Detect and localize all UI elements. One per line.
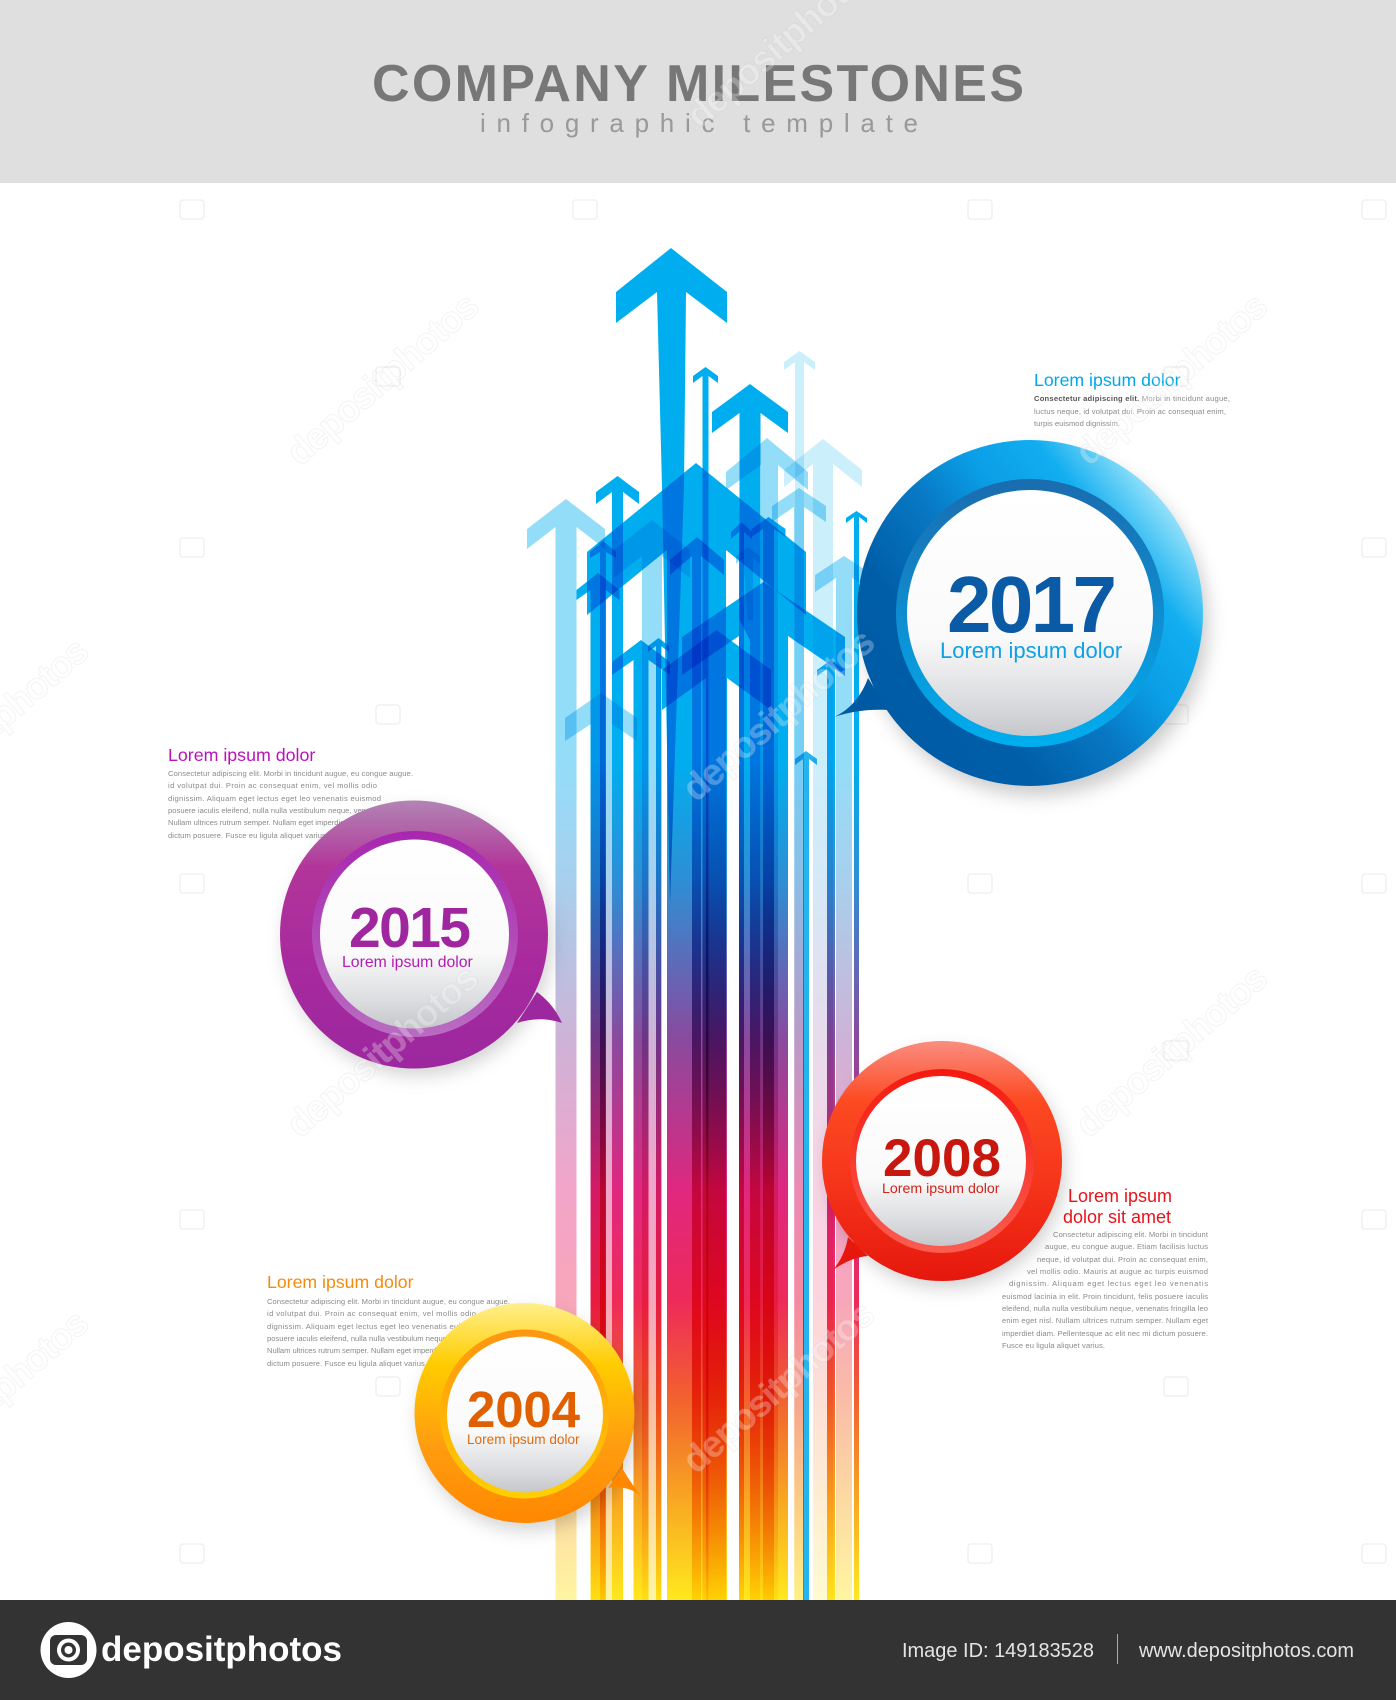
body: 2004 (267, 1297, 511, 1368)
body: 2015: Nullam ultrices rutrum semper. Nullam eget imperdiet diam. Pellentesque (168, 818, 413, 827)
heading: 2008 (1063, 1186, 1172, 1227)
header band (0, 0, 1396, 183)
year: 2008: 2008 (883, 1129, 1001, 1188)
body: 2017: Consectetur adipiscing elit. Morbi in tincidunt augue, (1034, 394, 1230, 403)
year: 2015: 2015 (349, 896, 471, 960)
heading: 2008: dolor sit amet (1063, 1207, 1171, 1227)
body: 2017: luctus neque, id volutpat dui. Proin ac consequat enim, (1034, 407, 1226, 416)
body: 2008 (1002, 1230, 1209, 1350)
text block: 2017 (1034, 370, 1230, 428)
body: 2017 (1034, 394, 1230, 428)
body: 2008: neque, id volutpat dui. Proin ac consequat enim, (1037, 1255, 1208, 1264)
body: 2015: posuere iaculis eleifend, nulla nulla vestibulum neque, venenatis fringilla (168, 806, 414, 815)
watermark camera icons (180, 200, 1386, 1563)
body: 2008: imperdiet diam. Pellentesque ac elit nec mi dictum posuere. (1002, 1329, 1208, 1338)
watermarks: depositphotos (1067, 285, 1275, 473)
title: COMPANY MILESTONES (372, 55, 1024, 113)
body: 2008: vel mollis odio. Mauris at augue ac turpis euismod (1027, 1267, 1208, 1276)
body: 2015: dignissim. Aliquam eget lectus eget leo venenatis euismod (168, 794, 381, 803)
body: 2004: dictum posuere. Fusce eu ligula aliquet varius. (267, 1359, 427, 1368)
year: 2004: 2004 (467, 1381, 581, 1438)
body: 2015 (168, 769, 414, 840)
text block: 2015 (168, 745, 414, 840)
footer logo icon (40, 1622, 96, 1678)
body: 2015: dictum posuere. Fusce eu ligula aliquet varius. (168, 831, 328, 840)
image id: Image ID: 149183528 (902, 1640, 1094, 1662)
label: 2008: Lorem ipsum dolor (882, 1181, 1000, 1197)
body: 2008: Fusce eu ligula aliquet varius. (1002, 1341, 1105, 1350)
watermarks: depositphotos (674, 1293, 882, 1481)
label: 2015: Lorem ipsum dolor (342, 954, 473, 971)
text block: 2008 (1002, 1186, 1209, 1350)
body: 2015: Consectetur adipiscing elit. Morbi in tincidunt augue, eu congue augue. (168, 769, 413, 778)
website: www.depositphotos.com (1138, 1640, 1354, 1662)
milestone bubble: 2004 (414, 1303, 640, 1530)
watermarks: depositphotos (278, 957, 486, 1145)
milestone bubble: 2015 (280, 800, 562, 1075)
body: 2004: posuere iaculis eleifend, nulla nulla vestibulum neque, venenatis fringilla (267, 1334, 511, 1343)
year: 2017: 2017 (947, 560, 1117, 649)
footer logo text: depositphotos (101, 1630, 342, 1669)
watermarks: depositphotos (278, 285, 486, 473)
body: 2004: Nullam ultrices rutrum semper. Nullam eget imperdiet diam. Pellentesque (267, 1346, 510, 1355)
body: 2008: augue, eu congue augue. Etiam facilisis luctus (1045, 1242, 1208, 1251)
body: 2008: dignissim. Aliquam eget lectus eget leo venenatis (1009, 1279, 1208, 1288)
rising arrows chart (527, 248, 873, 1600)
label: 2017: Lorem ipsum dolor (940, 638, 1122, 663)
watermarks: depositphotos (674, 621, 882, 809)
body: 2008: enim eget nisl. Nullam ultrices rutrum semper. Nullam eget (1002, 1316, 1209, 1325)
milestone bubble: 2008 (822, 1041, 1065, 1288)
body: 2004: dignissim. Aliquam eget lectus eget leo venenatis euismod (267, 1322, 480, 1331)
watermarks: depositphotos (1067, 957, 1275, 1145)
body: 2008: euismod lacinia in elit. Proin tincidunt, felis posuere iaculis (1002, 1292, 1208, 1301)
tail: 2017 (834, 678, 888, 717)
body: 2004: Consectetur adipiscing elit. Morbi in tincidunt augue, eu congue augue. (267, 1297, 510, 1306)
body: 2008: Consectetur adipiscing elit. Morbi in tincidunt (1053, 1230, 1209, 1239)
heading: 2004: Lorem ipsum dolor (267, 1272, 414, 1292)
heading: 2008: Lorem ipsum (1068, 1186, 1172, 1206)
heading: 2017: Lorem ipsum dolor (1034, 370, 1181, 390)
tail: 2015 (517, 992, 562, 1023)
text block: 2004 (267, 1272, 511, 1368)
tail: 2004 (608, 1468, 640, 1495)
subtitle: infographic template (480, 108, 918, 138)
body: 2004: id volutpat dui. Proin ac consequat enim, vel mollis odio (267, 1309, 476, 1318)
heading: 2015: Lorem ipsum dolor (168, 745, 315, 765)
footer bar (0, 1600, 1396, 1700)
label: 2004: Lorem ipsum dolor (467, 1432, 580, 1447)
body: 2015: id volutpat dui. Proin ac consequat enim, vel mollis odio (168, 781, 377, 790)
body: 2017: turpis euismod dignissim. (1034, 419, 1120, 428)
tail: 2008 (833, 1237, 868, 1270)
body: 2008: eleifend, nulla nulla vestibulum neque, venenatis fringilla leo (1002, 1304, 1208, 1313)
milestone bubble: 2017 (834, 440, 1208, 796)
